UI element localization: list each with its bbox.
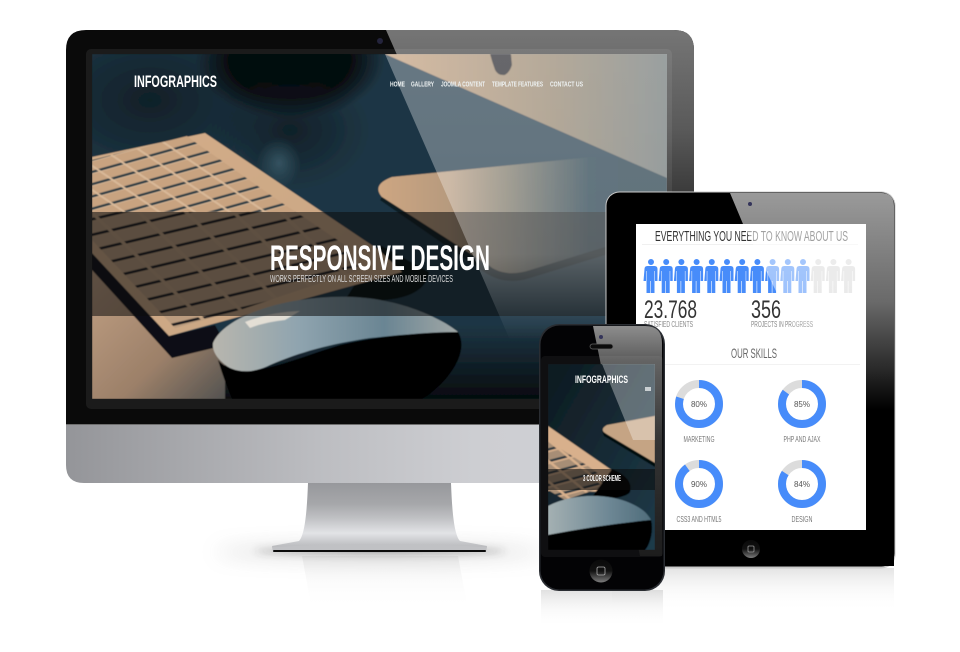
photo background [92, 54, 667, 399]
donut: php and ajax 85%: PHP AND AJAX [784, 435, 821, 444]
stat: satisfied clients: SATISFIED CLIENTS [644, 320, 693, 329]
monitor reflection and shadow [215, 546, 545, 610]
donut: marketing 80% [679, 384, 719, 444]
donut: marketing 80%: MARKETING [684, 435, 714, 444]
site navigation: TEMPLATE FEATURES [492, 80, 543, 88]
tablet reflection [612, 568, 894, 612]
monitor stand [272, 483, 487, 552]
monitor chin [66, 424, 694, 483]
photo keyboard shadow [92, 253, 226, 358]
photo table [92, 262, 232, 399]
phone photo: mouse [548, 496, 651, 535]
donut: php and ajax 85%: 85% [794, 400, 810, 409]
skills heading: OUR SKILLS [731, 345, 777, 361]
photo mouse shadow [218, 332, 461, 399]
donut: marketing 80%: 80% [691, 400, 707, 409]
stat: projects in progress: PROJECTS IN PROGRESS [751, 320, 813, 329]
monitor body [66, 30, 694, 483]
donut: design 84%: DESIGN [792, 515, 813, 524]
phone photo: keyboard [548, 425, 612, 493]
screen glare on tablet [747, 231, 855, 327]
photo mouse [213, 297, 458, 371]
hamburger menu icon [645, 387, 651, 391]
tablet screen [636, 224, 866, 530]
monitor camera [377, 38, 383, 44]
hero subtitle: WORKS PERFECTLY ON ALL SCREEN SIZES AND MOBILE DEVICES [270, 274, 453, 285]
phone home button [590, 560, 612, 582]
photo keyboard [92, 133, 402, 336]
stat: satisfied clients: 23.768 [644, 296, 697, 324]
site navigation: GALLERY [411, 80, 434, 88]
photo trackpad [378, 159, 580, 274]
donut: design 84% [782, 464, 822, 524]
donut: php and ajax 85% [782, 384, 822, 444]
stat: projects in progress: 356 [751, 296, 781, 324]
stat: satisfied clients [644, 300, 696, 327]
phone screen glare [602, 364, 655, 440]
people pictogram [644, 259, 855, 293]
tablet home button [742, 540, 760, 558]
donut: css3 and html5 90%: CSS3 AND HTML5 [676, 515, 722, 524]
phone screen [548, 364, 655, 550]
site navigation [390, 82, 583, 86]
phone band [548, 469, 655, 490]
phone photo: trackpad [603, 416, 655, 463]
site navigation: CONTACT US [550, 80, 583, 88]
site logo: INFOGRAPHICS [134, 73, 217, 91]
monitor screen [92, 54, 667, 399]
apple logo [490, 54, 512, 75]
hero band [92, 212, 606, 316]
donut: css3 and html5 90% [676, 464, 722, 524]
site navigation: HOME [390, 80, 405, 88]
phone logo: INFOGRAPHICS [575, 374, 628, 386]
photo floor shade [224, 333, 540, 399]
donut: css3 and html5 90%: 90% [691, 480, 707, 489]
phone hero text: 3 COLOR SCHEME [583, 474, 621, 483]
hero heading: RESPONSIVE DESIGN [270, 239, 490, 278]
screen glare [385, 54, 667, 340]
donut: design 84%: 84% [794, 480, 810, 489]
phone camera and speaker [590, 335, 613, 349]
tablet [606, 192, 896, 568]
stat: projects in progress [751, 300, 813, 327]
tablet camera [748, 202, 752, 206]
phone reflection [541, 590, 663, 628]
phone [539, 324, 665, 591]
site navigation: JOOMLA CONTENT [441, 80, 485, 88]
